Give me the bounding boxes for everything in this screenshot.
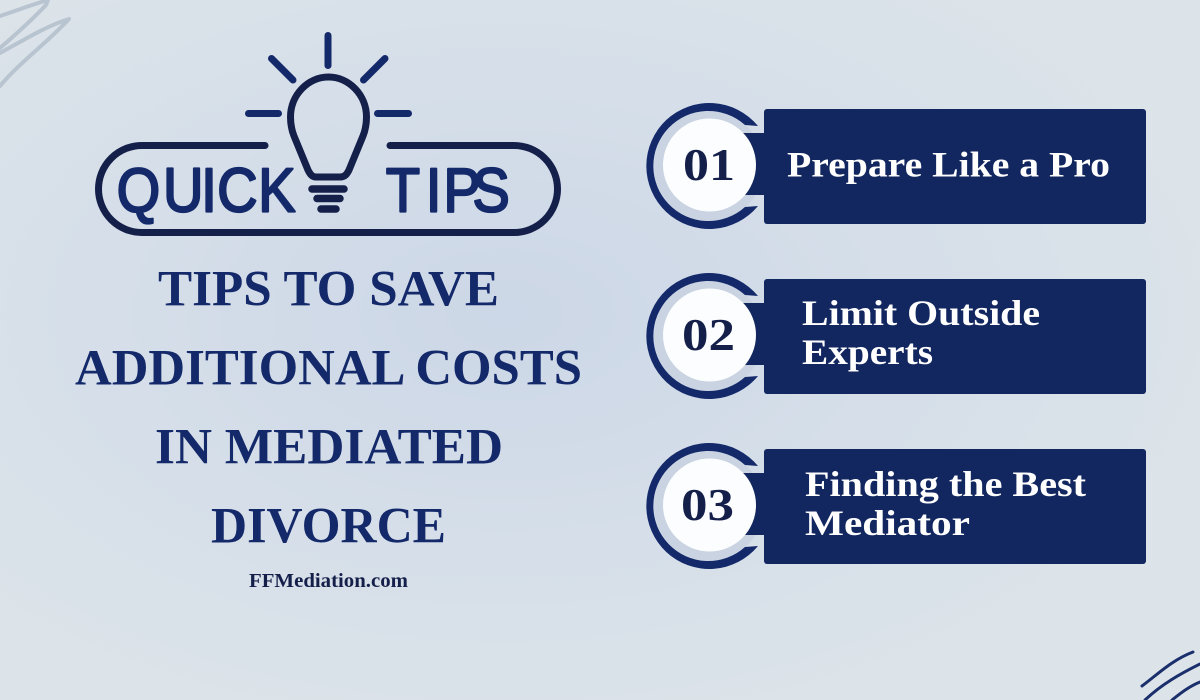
tip 3 text: Mediator [805,503,970,543]
tip 1 number: 01 [683,140,735,190]
label: tips: TIPS [386,157,510,225]
tip 3 [646,443,1146,569]
tip 1 [646,103,1146,229]
pill outline [98,146,558,232]
tip 3 number: 03 [681,480,734,530]
tip 1 banner [764,109,1146,224]
title: TIPS TO SAVE [158,262,499,318]
tip 1 number disc [663,118,756,212]
title: IN MEDIATED [155,420,503,476]
tip 3 ring [646,443,758,569]
source: website: FFMediation.com [249,570,408,592]
tip 3 connector [740,473,770,535]
tip 2 light ring [654,281,764,391]
tip 3 banner [764,449,1146,564]
tip 2 text: Limit Outside [802,293,1040,333]
decorative lines bottom right [1142,652,1200,700]
decorative scribble top left [0,0,69,86]
tip 1 connector [740,133,770,195]
tip 3 light ring [654,451,764,561]
tip 3 number disc [663,458,756,552]
logo: quick tips [98,36,558,232]
tip 1 light ring [654,111,764,221]
tip 2 banner [764,279,1146,394]
tip 1 text: Prepare Like a Pro [787,144,1110,184]
tip 2 [646,273,1146,399]
tip 2 text [802,293,1040,372]
tip 2 number: 02 [682,310,735,360]
label: quick: QUICK [117,157,296,225]
tip 1 ring [646,103,758,229]
title: ADDITIONAL COSTS [75,340,582,396]
icon: lightbulb rays [248,36,408,114]
title [75,262,582,554]
tip 3 text: Finding the Best [805,464,1086,504]
icon: lightbulb [290,77,366,209]
title: DIVORCE [211,498,446,554]
tip 2 ring [646,273,758,399]
tip 3 text [805,464,1086,543]
tip 2 text: Experts [802,332,933,372]
tip 2 connector [740,303,770,365]
tip 2 number disc [663,288,756,382]
